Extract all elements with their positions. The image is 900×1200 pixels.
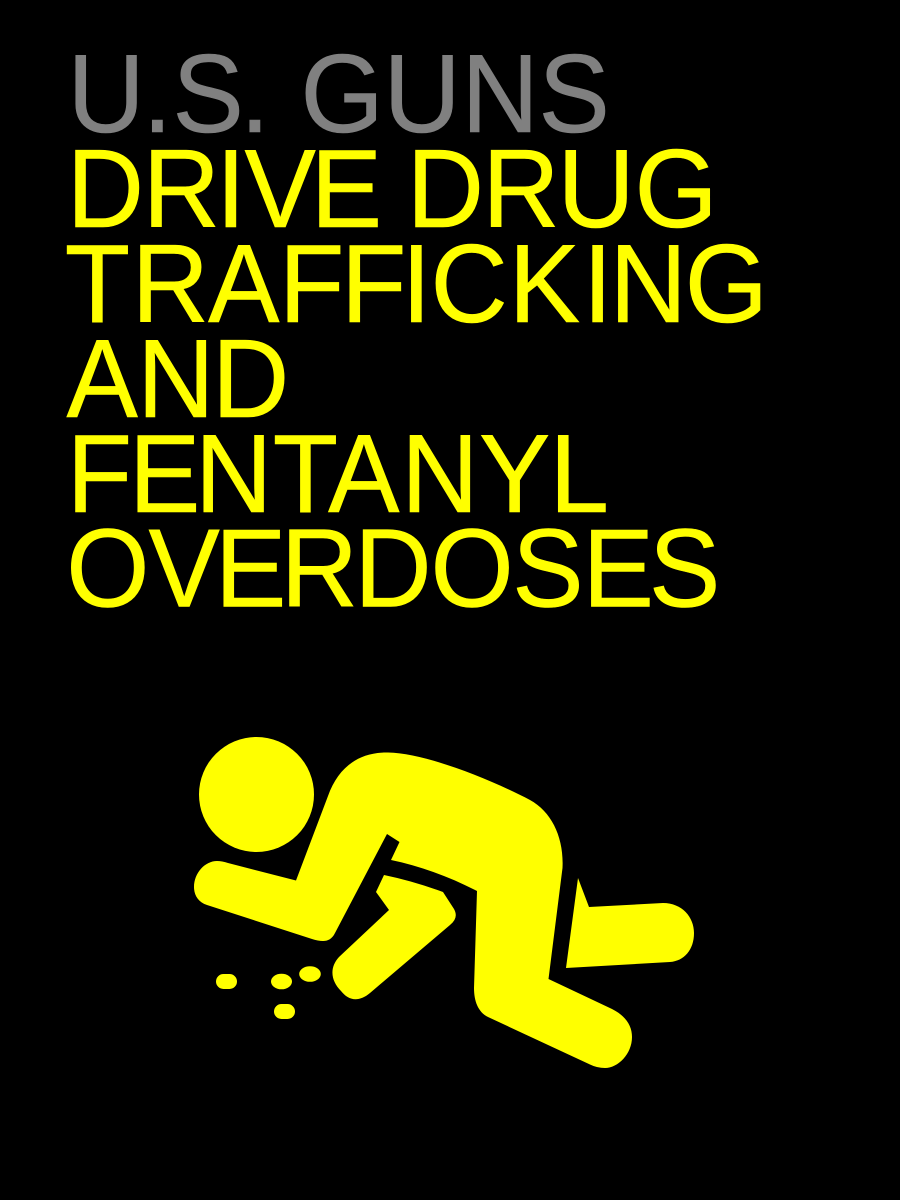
title [65,32,768,631]
title line: AND: AND [66,317,289,441]
icon: person collapsed and vomiting [194,737,694,1068]
icon: rear foot [566,878,694,968]
icon: head [199,737,314,852]
title line: U.S. GUNS: U.S. GUNS [68,32,610,156]
title line: FENTANYL: FENTANYL [67,412,609,536]
title line: DRIVE DRUG: DRIVE DRUG [67,127,718,251]
icon: bent knee and lower limb [332,875,456,999]
icon: torso, arm and leg [194,752,632,1068]
title line: OVERDOSES: OVERDOSES [66,507,720,631]
icon: vomit droplets [216,966,321,1019]
title line: TRAFFICKING: TRAFFICKING [65,222,768,346]
